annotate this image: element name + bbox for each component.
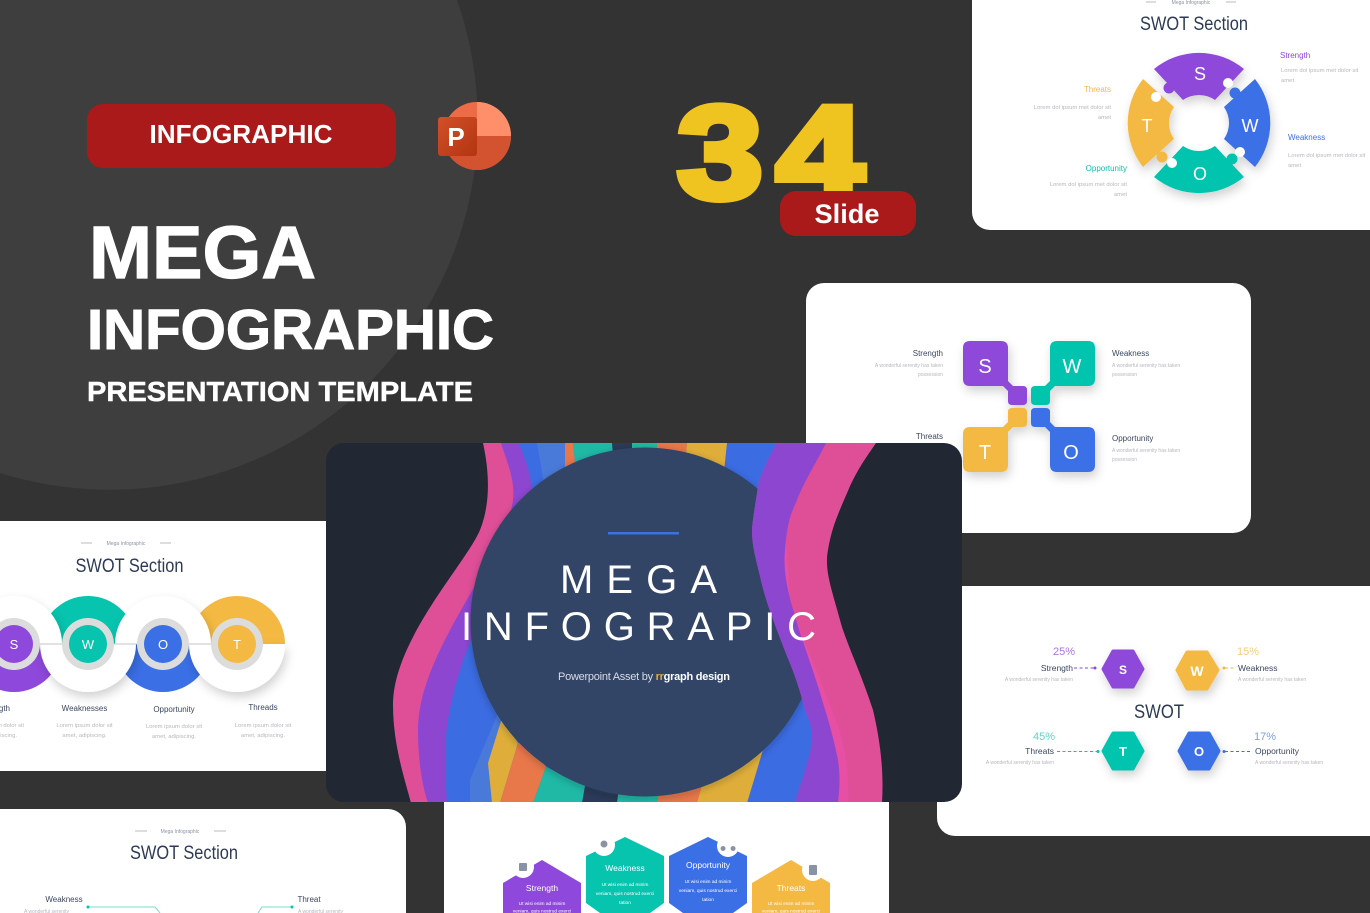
slide header: SWOT Section xyxy=(130,843,238,864)
label: strength xyxy=(1280,51,1359,84)
label: opportunity: Opportunity xyxy=(1086,164,1127,173)
slide count: Slide xyxy=(814,199,880,229)
label: strength xyxy=(1005,646,1096,683)
label: opportunity: Opportunity xyxy=(1255,746,1300,756)
slide header xyxy=(1140,0,1248,35)
label: weakness xyxy=(1222,646,1306,683)
overlapping circles chart: W xyxy=(82,637,95,652)
label: strength xyxy=(875,349,943,378)
label: opportunity xyxy=(1050,164,1127,198)
hexagon: strength: Ut wisi enim ad minim xyxy=(519,901,565,907)
label: opportunity: A wonderful serenity has taken xyxy=(1255,760,1323,766)
accent line xyxy=(608,532,679,534)
slide header: SWOT Section xyxy=(1140,14,1248,35)
hexagon: opportunity: veniam, quis nostrud exerci xyxy=(679,888,737,894)
hexagon S xyxy=(1103,651,1143,687)
square T xyxy=(963,408,1027,472)
overlapping circles chart: T xyxy=(233,637,241,652)
hexagon T xyxy=(1103,733,1143,769)
label: weakness: Weakness xyxy=(45,895,83,904)
label: opportunity: Opportunity xyxy=(1112,434,1153,443)
decorative large circle xyxy=(0,0,478,490)
label: weakness: 15% xyxy=(1237,646,1259,658)
hexagon T: T xyxy=(1119,744,1127,759)
label: opportunity: Lorem ipsum dolor sit xyxy=(146,724,203,730)
label: weakness: A wonderful serenity has taken xyxy=(1238,677,1306,683)
label: strength: 25% xyxy=(1053,646,1075,658)
label: weakness xyxy=(1112,349,1180,378)
square O xyxy=(1031,408,1095,472)
label: opportunity xyxy=(146,705,203,740)
square S: S xyxy=(978,356,992,378)
slide header: Mega Infographic xyxy=(161,829,200,835)
label: strength xyxy=(0,704,24,739)
hexagon O: O xyxy=(1194,744,1204,759)
hexagon: weakness: tation xyxy=(619,900,631,906)
label: threads xyxy=(235,703,292,739)
hexagon: threats: Threats xyxy=(777,883,805,893)
label: opportunity: A wonderful serenity has taken xyxy=(1112,448,1180,454)
central circle xyxy=(470,448,820,796)
label: threats: 45% xyxy=(1033,731,1055,743)
colourful waves xyxy=(393,443,815,803)
label: opportunity: Opportunity xyxy=(153,705,195,714)
label: threats: Threats xyxy=(1025,746,1054,756)
icon: powerpoint xyxy=(438,102,511,170)
label: threats: amet xyxy=(1098,115,1111,121)
label: opportunity: Lorem dol ipsum met dolor sit xyxy=(1050,182,1127,188)
label: threads: Lorem ipsum dolor sit xyxy=(235,723,292,729)
label: threats: Threats xyxy=(1084,85,1111,94)
hexagon: weakness: veniam, quis nostrud exerci xyxy=(596,891,654,897)
label: threads: Threads xyxy=(248,703,278,712)
slide header: Mega Infographic xyxy=(1172,0,1211,6)
overlapping circles chart: S xyxy=(10,637,19,652)
label: strength: A wonderful serenity has taken xyxy=(875,363,943,369)
label: weakness: amet xyxy=(1288,163,1301,169)
label: weakness: Weakness xyxy=(1238,663,1278,673)
label: weakness: Lorem dol ipsum met dolor sit xyxy=(1288,153,1366,159)
hexagon: weakness: Ut wisi enim ad minim xyxy=(602,882,648,888)
hexagon: strength: Strength xyxy=(526,883,558,893)
label: strength: Strength xyxy=(1041,663,1073,673)
main title: INFOGRAPHIC xyxy=(87,298,494,362)
hexagon: weakness xyxy=(586,834,664,913)
panel: SWOT arrow hexagons slide xyxy=(444,802,889,913)
slide header xyxy=(76,541,182,572)
label: opportunity: 17% xyxy=(1254,731,1276,743)
label: weaknesses: Lorem ipsum dolor sit xyxy=(56,723,113,729)
overlapping circles chart: O xyxy=(158,637,168,652)
main title: MEGA xyxy=(89,211,316,294)
label: weakness xyxy=(24,895,160,913)
badge: infographic xyxy=(87,104,396,168)
slide header xyxy=(130,829,237,859)
square O: O xyxy=(1063,442,1079,464)
center word: SWOT xyxy=(1134,702,1184,723)
cover title xyxy=(464,565,814,640)
label: weakness xyxy=(1288,133,1366,169)
square S xyxy=(963,341,1027,405)
hexagon: opportunity: Ut wisi enim ad minim xyxy=(685,879,731,885)
badge: infographic: INFOGRAPHIC xyxy=(150,119,333,149)
label: threat: Threat xyxy=(297,895,321,904)
cover title: INFOGRAPIC xyxy=(461,605,816,649)
label: strength: amet xyxy=(1281,78,1294,84)
puzzle ring chart: S xyxy=(1194,64,1206,84)
label: threats xyxy=(1034,85,1111,121)
label: opportunity: amet xyxy=(1114,192,1127,198)
label: weaknesses: amet, adipiscing. xyxy=(62,733,107,739)
label: weaknesses: Weaknesses xyxy=(62,704,107,713)
slide header: Mega Infographic xyxy=(107,541,146,547)
hexagon: strength xyxy=(503,856,581,913)
label: strength: Lorem dol ipsum met dolor sit xyxy=(1281,68,1359,74)
hexagon: opportunity xyxy=(669,835,747,913)
square W xyxy=(1031,341,1095,405)
panel: SWOT circles slide xyxy=(0,521,326,771)
panel: SWOT section lower left slide xyxy=(0,809,406,913)
panel: main cover slide xyxy=(326,443,962,803)
label: strength: possession xyxy=(918,372,943,378)
cover title: MEGA xyxy=(560,558,717,602)
overlapping circles chart xyxy=(0,596,285,692)
label: strength: A wonderful serenity has taken xyxy=(1005,677,1073,683)
puzzle ring chart xyxy=(1128,53,1270,193)
slide header: SWOT Section xyxy=(76,556,184,577)
label: threads: amet, adipiscing. xyxy=(241,733,285,739)
icon: powerpoint: P xyxy=(447,122,465,152)
label: weakness: Weakness xyxy=(1112,349,1149,358)
hexagon: threats xyxy=(752,859,830,913)
cover subtitle: Powerpoint Asset by rrgraph design xyxy=(558,671,730,683)
slide count xyxy=(677,79,916,236)
puzzle ring chart: O xyxy=(1193,164,1207,184)
label: opportunity xyxy=(1222,731,1323,766)
label: threats: Threats xyxy=(916,432,943,441)
panel: SWOT hexagons slide xyxy=(937,586,1370,836)
label: weakness: Weakness xyxy=(1288,133,1325,142)
main title: PRESENTATION TEMPLATE xyxy=(87,376,473,407)
panel: SWOT squares slide xyxy=(806,283,1251,533)
label: opportunity: amet, adipiscing. xyxy=(152,734,196,740)
square W: W xyxy=(1063,356,1082,378)
hexagon: threats: Ut wisi enim ad minim xyxy=(768,901,814,907)
right waves over circle xyxy=(752,443,883,803)
slide count: 4 xyxy=(776,79,864,226)
label: opportunity: possession xyxy=(1112,457,1137,463)
hexagon: weakness: Weakness xyxy=(605,863,645,873)
puzzle ring chart: T xyxy=(1142,116,1152,136)
label: threats xyxy=(986,731,1100,766)
panel: SWOT puzzle ring slide xyxy=(972,0,1370,230)
hexagon W: W xyxy=(1190,663,1204,679)
label: opportunity xyxy=(1112,434,1180,463)
main title xyxy=(87,211,494,407)
hexagon O xyxy=(1179,733,1219,769)
puzzle ring chart: W xyxy=(1242,116,1258,136)
label: threat xyxy=(258,895,344,913)
label: weaknesses xyxy=(56,704,113,739)
label: threats: A wonderful serenity has taken xyxy=(986,760,1054,766)
label: strength: Strength xyxy=(913,349,943,358)
hexagon S: S xyxy=(1119,663,1127,677)
slide count: 3 xyxy=(677,79,763,226)
label: weakness: possession xyxy=(1112,372,1137,378)
hexagon W xyxy=(1177,652,1218,689)
label: strength: Strength xyxy=(1280,51,1310,60)
label: threats: Lorem dol ipsum met dolor sit xyxy=(1034,105,1111,111)
hexagon: opportunity: tation xyxy=(702,897,714,903)
label: weakness: A wonderful serenity has taken xyxy=(1112,363,1180,369)
hexagon: opportunity: Opportunity xyxy=(686,860,731,870)
square T: T xyxy=(979,442,991,464)
